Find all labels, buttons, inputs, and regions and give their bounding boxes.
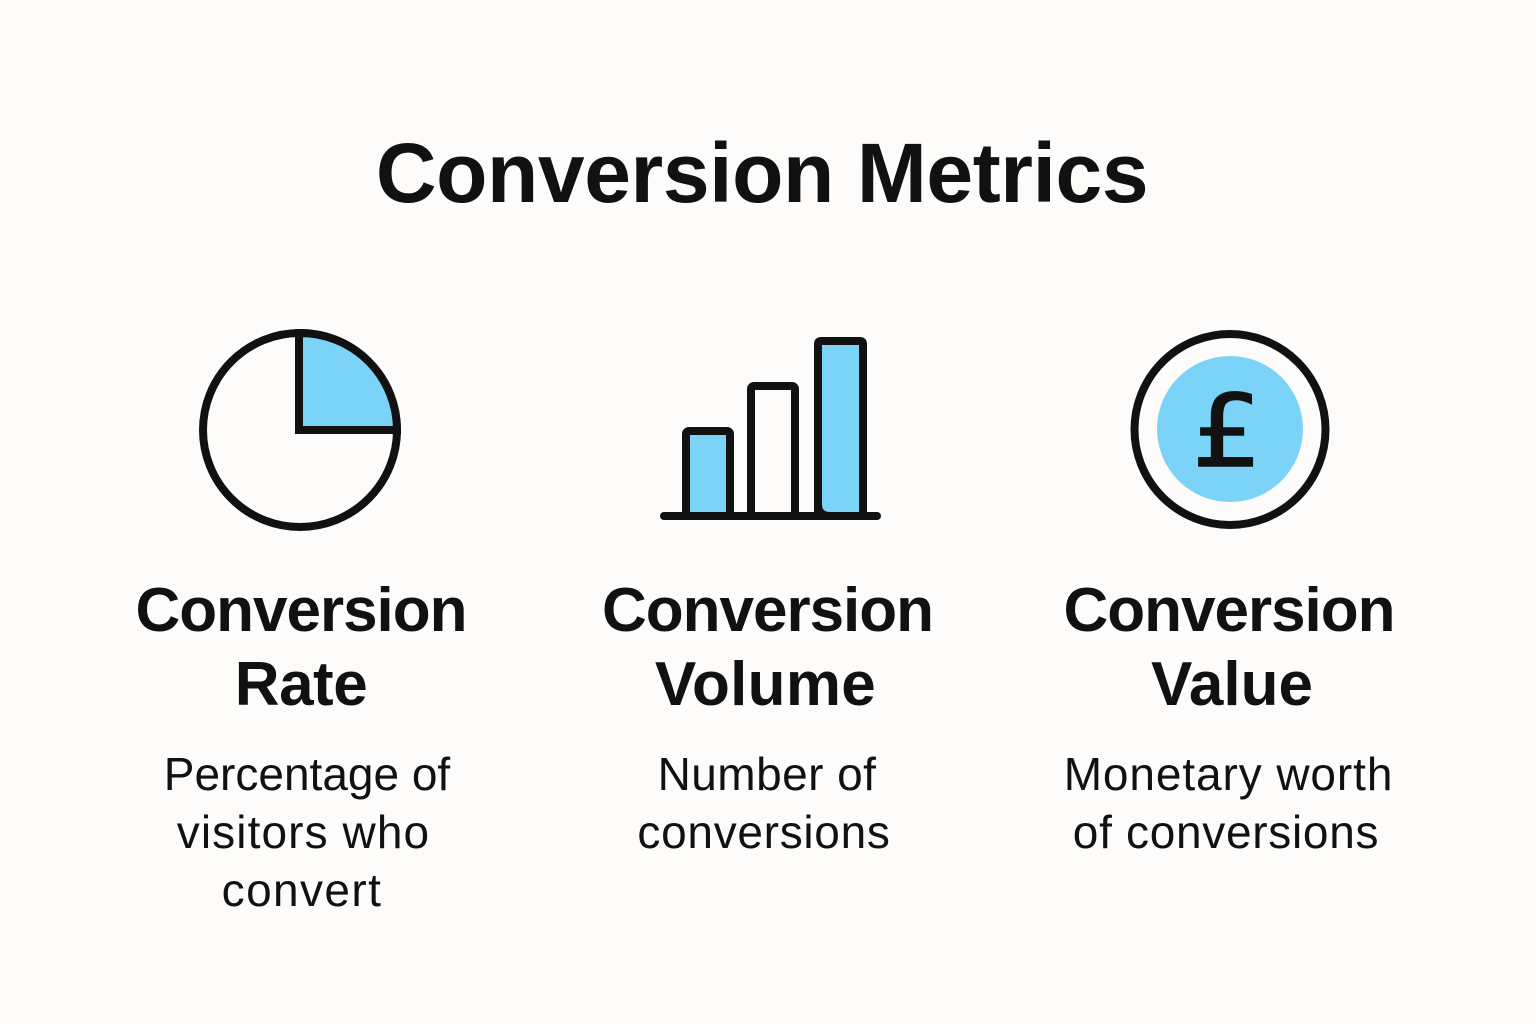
heading: conversion volume: Conversion xyxy=(602,576,933,645)
text: conversion rate description: visitors who xyxy=(177,806,430,858)
text: conversion rate description: Percentage of xyxy=(164,748,450,800)
text: conversion rate description xyxy=(164,748,450,916)
heading: conversion volume: Volume xyxy=(655,650,876,719)
text: conversion value description: of conversions xyxy=(1073,806,1379,858)
text: conversion volume description xyxy=(637,748,891,858)
heading: conversion rate xyxy=(135,576,467,719)
text: conversion value description xyxy=(1064,748,1393,858)
title: Conversion Metrics xyxy=(376,126,1148,220)
text: conversion volume description: Number of xyxy=(658,748,876,800)
heading: conversion value: Value xyxy=(1151,650,1313,719)
heading: conversion rate: Conversion xyxy=(135,576,467,645)
heading: conversion rate: Rate xyxy=(235,650,367,719)
heading: conversion volume xyxy=(602,576,933,719)
heading: conversion value xyxy=(1063,576,1395,719)
text: conversion volume description: conversions xyxy=(637,806,891,858)
icon: pound coin: £ xyxy=(1192,373,1262,490)
heading: conversion value: Conversion xyxy=(1063,576,1395,645)
text: conversion rate description: convert xyxy=(222,864,382,916)
text: conversion value description: Monetary worth xyxy=(1064,748,1393,800)
